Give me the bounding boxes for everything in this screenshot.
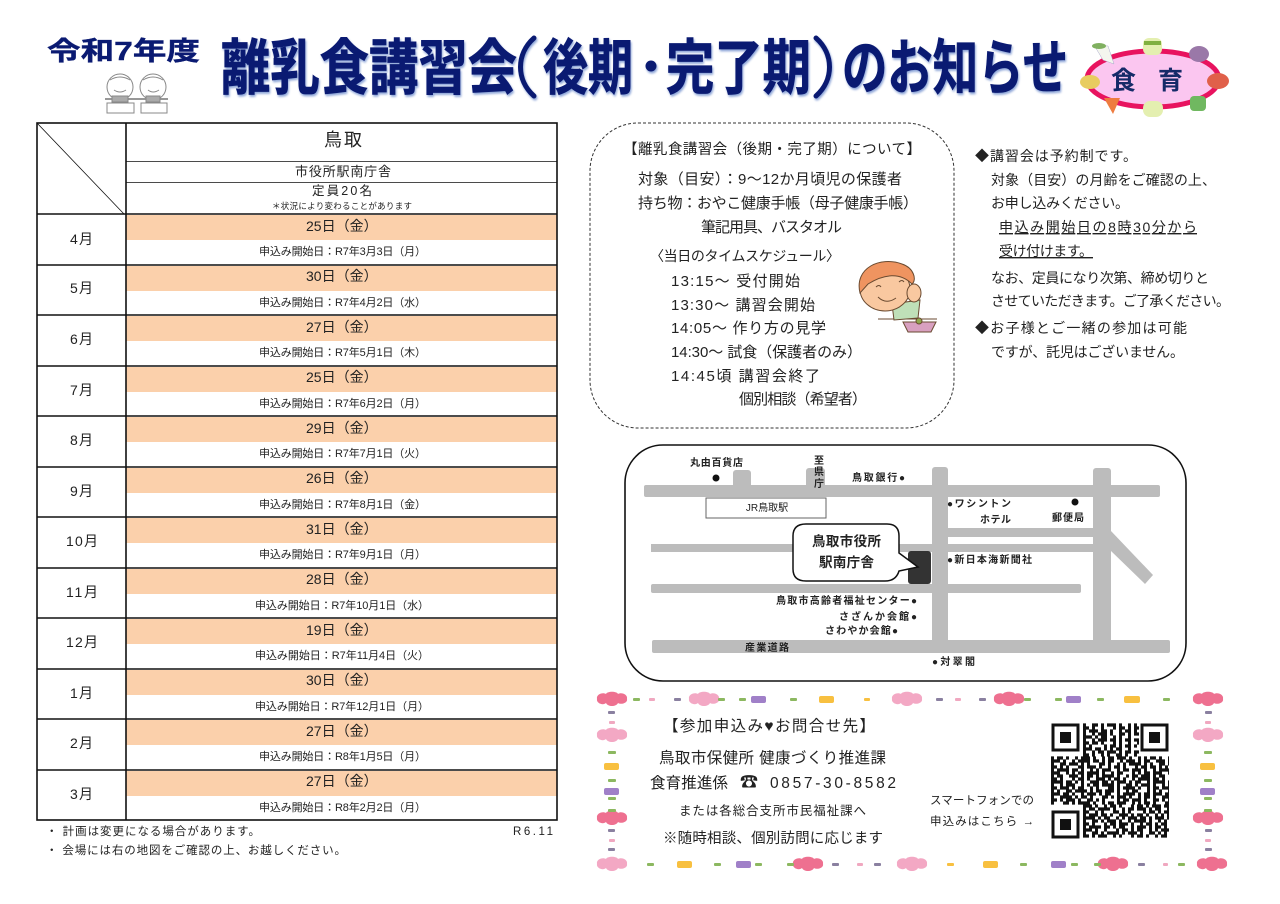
map labels: ●新日本海新聞社: [947, 553, 1032, 566]
year label: 令和7年度: [47, 36, 200, 66]
notes on reservations: させていただきます。ご了承ください。: [991, 293, 1230, 309]
panel: contact with flower border: [597, 692, 1227, 871]
month labels: 9月: [70, 483, 93, 499]
icon: shokuiku vegetable ring: 食: [1111, 67, 1136, 95]
consultation note: ※随時相談、個別訪問に応じます: [663, 830, 883, 847]
application start dates: 申込み開始日：R7年8月1日（金）: [259, 497, 426, 511]
notes on reservations: お申し込みください。: [991, 195, 1129, 211]
target and belongings: 筆記用具、バスタオル: [701, 219, 842, 236]
month labels: 6月: [70, 331, 93, 347]
map labels: さわやか会館●: [825, 624, 898, 637]
month labels: 5月: [70, 280, 93, 296]
dates: 29日（金）: [306, 420, 378, 436]
application start dates: 申込み開始日：R7年9月1日（月）: [259, 547, 426, 561]
contact details: 鳥取市保健所 健康づくり推進課: [659, 749, 886, 767]
month labels: 1月: [70, 685, 93, 701]
panel heading: 【離乳食講習会（後期・完了期）について】: [623, 141, 921, 158]
dates: 27日（金）: [306, 319, 378, 335]
icon: baby with bowl: [859, 262, 937, 332]
application start dates: 申込み開始日：R7年11月4日（火）: [255, 648, 429, 662]
contact heading: 【参加申込み♥お問合せ先】: [663, 717, 875, 735]
map labels: 鳥取銀行●: [852, 471, 905, 484]
application start dates: [255, 244, 429, 814]
icon: two babies eating: [105, 74, 168, 113]
map labels: 至: [814, 455, 824, 467]
flower border: [597, 692, 1227, 871]
roads: [644, 467, 1170, 653]
dates: 30日（金）: [306, 672, 378, 688]
month labels: [66, 231, 98, 802]
dates: 25日（金）: [306, 218, 378, 234]
map labels: ホテル: [980, 514, 1011, 526]
target and belongings: [638, 171, 918, 236]
month labels: 2月: [70, 735, 93, 751]
table grid: [37, 123, 557, 820]
timetable: 13:30～ 講習会開始: [671, 297, 815, 314]
map labels: 県: [814, 466, 824, 478]
title: のお知らせ: [842, 35, 1068, 102]
map: [625, 445, 1186, 681]
panel: about the class: [590, 123, 954, 428]
application start dates: 申込み開始日：R7年12月1日（月）: [255, 699, 429, 713]
dates: 27日（金）: [306, 773, 378, 789]
month labels: 8月: [70, 432, 93, 448]
application start dates: 申込み開始日：R7年6月2日（月）: [259, 396, 426, 410]
table header: 鳥取: [324, 130, 362, 150]
callout: office name: [793, 524, 918, 581]
map labels: 丸由百貨店: [690, 456, 743, 469]
dates: 28日（金）: [306, 571, 378, 587]
month labels: 10月: [66, 533, 98, 549]
application start dates: 申込み開始日：R8年1月5日（月）: [259, 749, 426, 763]
application start dates: 申込み開始日：R7年4月2日（水）: [259, 295, 426, 309]
dates: 27日（金）: [306, 723, 378, 739]
notes on reservations: なお、定員になり次第、締め切りと: [991, 270, 1209, 286]
building: city office: [908, 551, 931, 584]
QR code: [1051, 725, 1169, 837]
timetable: 14:30～ 試食（保護者のみ）: [671, 344, 862, 361]
contact details: [650, 749, 896, 792]
map labels: 庁: [814, 478, 824, 490]
notes on reservations: 対象（目安）の月齢をご確認の上、: [991, 172, 1216, 188]
title: 完了期: [666, 35, 811, 102]
notes on reservations: 申込み開始日の8時30分から: [999, 219, 1197, 235]
JR station box: [706, 498, 826, 518]
smartphone note: 申込みはこちら →: [930, 815, 1034, 828]
table header: [272, 130, 412, 211]
notes on reservations: 受け付けます。: [999, 243, 1093, 259]
table footnotes: [46, 824, 553, 857]
table footnotes: ・ 計画は変更になる場合があります。: [46, 824, 260, 838]
dates: 26日（金）: [306, 470, 378, 486]
table header: ＊状況により変わることがあります: [272, 201, 412, 211]
contact details: 0857-30-8582: [770, 775, 896, 792]
notes on reservations: ◆講習会は予約制です。: [975, 148, 1137, 164]
table footnotes: R6.11: [513, 826, 553, 838]
dates: 31日（金）: [306, 521, 378, 537]
contact details: ☎: [740, 772, 758, 792]
title: [221, 35, 1068, 102]
smartphone note: [930, 795, 1034, 828]
month labels: 3月: [70, 786, 93, 802]
title: 後期: [543, 35, 633, 102]
table: schedule: [37, 123, 557, 820]
dates: 25日（金）: [306, 369, 378, 385]
table footnotes: ・ 会場には右の地図をご確認の上、お越しください。: [46, 843, 346, 857]
month labels: 12月: [66, 634, 98, 650]
callout: office name: 駅南庁舎: [819, 554, 874, 570]
icon: shokuiku vegetable ring: 育: [1158, 67, 1183, 95]
dates: [306, 218, 378, 789]
map labels: さざんか会館●: [839, 610, 917, 623]
month labels: 11月: [66, 584, 98, 600]
map labels: 郵便局: [1052, 511, 1084, 524]
alternative contact: または各総合支所市民福祉課へ: [679, 803, 866, 818]
dates: 19日（金）: [306, 622, 378, 638]
timetable: 13:15～ 受付開始: [671, 273, 800, 290]
map labels: [690, 455, 1084, 668]
map labels: 産業道路: [745, 641, 789, 654]
target and belongings: 持ち物：おやこ健康手帳（母子健康手帳）: [638, 195, 918, 212]
orange date bands: [126, 215, 557, 796]
application start dates: 申込み開始日：R7年5月1日（木）: [259, 345, 426, 359]
application start dates: 申込み開始日：R7年10月1日（水）: [255, 598, 429, 612]
month labels: 7月: [70, 382, 93, 398]
map: JR鳥取駅: [746, 501, 788, 514]
timetable: 個別相談（希望者）: [739, 391, 867, 408]
application start dates: 申込み開始日：R8年2月2日（月）: [259, 800, 426, 814]
timetable: [650, 248, 867, 408]
callout: office name: 鳥取市役所: [812, 533, 882, 549]
application start dates: 申込み開始日：R7年3月3日（月）: [259, 244, 426, 258]
title: 離乳食講習会: [221, 35, 517, 102]
timetable: 14:45頃 講習会終了: [671, 368, 820, 385]
notes on reservations: [975, 148, 1230, 360]
application start dates: 申込み開始日：R7年7月1日（火）: [259, 446, 426, 460]
map labels: ●ワシントン: [947, 498, 1011, 510]
month labels: 4月: [70, 231, 93, 247]
map labels: ●対翠閣: [932, 655, 975, 668]
table header: 定員20名: [312, 183, 372, 198]
notes on reservations: ですが、託児はございません。: [991, 344, 1184, 360]
dates: 30日（金）: [306, 268, 378, 284]
table header: 市役所駅南庁舎: [295, 164, 391, 179]
notes on reservations: ◆お子様とご一緒の参加は可能: [975, 320, 1187, 336]
smartphone note: スマートフォンでの: [930, 795, 1034, 807]
contact details: 食育推進係: [650, 774, 728, 792]
timetable: 〈当日のタイムスケジュール〉: [650, 248, 840, 264]
timetable: 14:05～ 作り方の見学: [671, 320, 826, 337]
target and belongings: 対象（目安）：9～12か月頃児の保護者: [638, 171, 902, 188]
map labels: 鳥取市高齢者福祉センター●: [776, 594, 917, 607]
icon: shokuiku vegetable ring: [1080, 38, 1229, 117]
